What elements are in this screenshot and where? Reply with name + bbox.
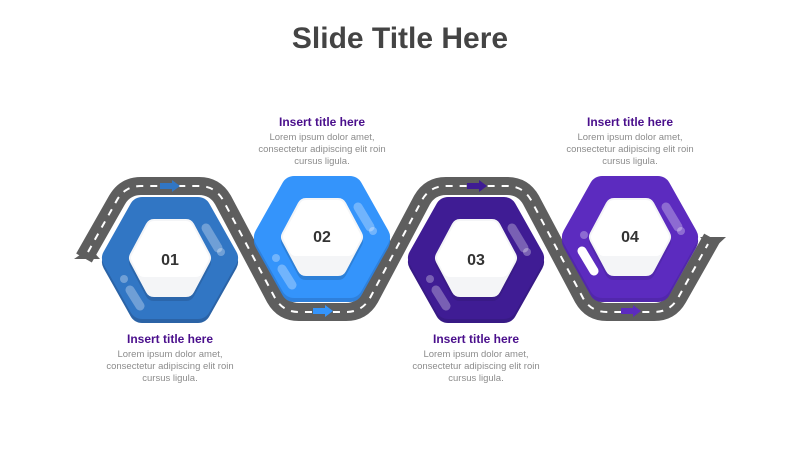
text block 03: consectetur adipiscing elit roin (412, 361, 540, 372)
text block 03: cursus ligula. (448, 373, 504, 384)
text block 01: consectetur adipiscing elit roin (106, 361, 234, 372)
text block 01: cursus ligula. (142, 373, 198, 384)
number 03: 03 (467, 252, 485, 269)
number 02: 02 (313, 229, 331, 246)
hexagon 02 (267, 189, 377, 289)
hexagon 04 (575, 189, 685, 289)
arrow 3 (467, 180, 487, 192)
text block 02 (258, 115, 386, 167)
arrow 4 (621, 305, 641, 317)
text block 01: Insert title here (127, 332, 213, 346)
text block 04: cursus ligula. (602, 156, 658, 167)
text block 04: Lorem ipsum dolor amet, (577, 132, 683, 143)
hexagon 03 (421, 210, 531, 310)
hexagon 01 (115, 210, 225, 310)
arrow 1 (160, 180, 180, 192)
text block 02: cursus ligula. (294, 156, 350, 167)
text block 04: Insert title here (587, 115, 673, 129)
text block 02: Insert title here (279, 115, 365, 129)
text block 03: Lorem ipsum dolor amet, (423, 349, 529, 360)
text block 04 (566, 115, 694, 167)
text block 04: consectetur adipiscing elit roin (566, 144, 694, 155)
text block 02: Lorem ipsum dolor amet, (269, 132, 375, 143)
text block 01 (106, 332, 234, 384)
arrow 2 (313, 305, 333, 317)
text block 02: consectetur adipiscing elit roin (258, 144, 386, 155)
text block 01: Lorem ipsum dolor amet, (117, 349, 223, 360)
road (74, 180, 726, 317)
text block 03 (412, 332, 540, 384)
text block 03: Insert title here (433, 332, 519, 346)
title: Slide Title Here (292, 22, 508, 55)
number 04: 04 (621, 229, 639, 246)
number 01: 01 (161, 252, 179, 269)
